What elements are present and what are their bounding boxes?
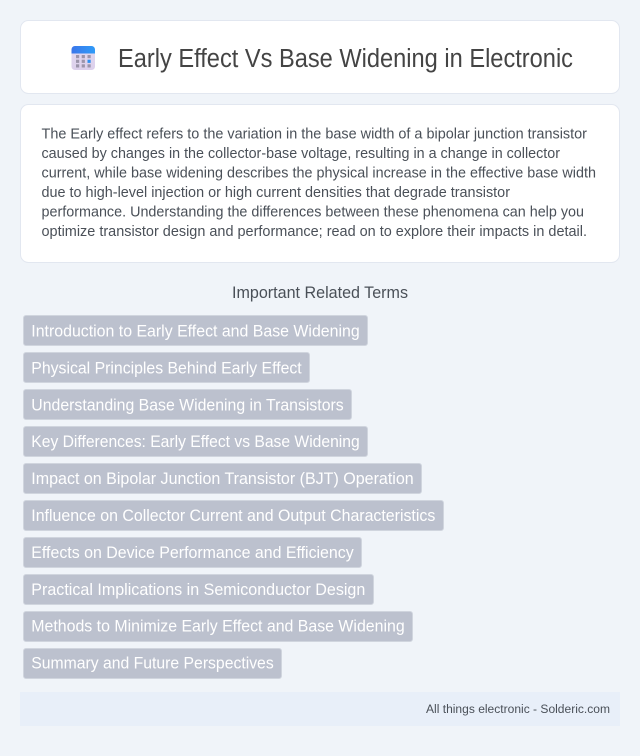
tag: methods to minimize: Methods to Minimize Early Effect and Base Widening (31, 618, 405, 636)
tag: device performance (24, 538, 362, 568)
panel: header card (20, 20, 620, 94)
text block: intro paragraph: performance. Understanding the differences between these phenomena can help you (42, 204, 584, 221)
text block: intro paragraph: caused by changes in the collector-base voltage, resulting in a change in collector (42, 145, 560, 162)
tag: physical principles (24, 352, 310, 382)
tag: practical implications (24, 574, 374, 604)
tag: collector current (24, 500, 444, 530)
tag: BJT impact (24, 464, 422, 494)
title: Early Effect Vs Base Widening in Electronic (118, 45, 573, 73)
tag: understanding base widening (24, 390, 352, 420)
footer bar (20, 692, 620, 726)
tag: BJT impact: Impact on Bipolar Junction Transistor (BJT) Operation (31, 470, 414, 488)
icon: calendar (72, 46, 95, 70)
tag: physical principles: Physical Principles Behind Early Effect (31, 359, 302, 377)
list: related term tags (24, 316, 444, 678)
tag: introduction (24, 316, 368, 346)
tag: methods to minimize (24, 612, 412, 642)
tag: understanding base widening: Understanding Base Widening in Transistors (31, 396, 344, 414)
text block: intro paragraph: due to high-level injection or high current densities that degrade transistor (42, 184, 510, 201)
tag: key differences (24, 426, 368, 456)
text block: intro paragraph: current, while base widening describes the physical increase in the effective base width (42, 165, 596, 182)
text block: intro paragraph: optimize transistor design and performance; read on to explore their impacts in detail. (42, 223, 587, 240)
tag: practical implications: Practical Implications in Semiconductor Design (31, 581, 365, 599)
text block: intro paragraph (42, 126, 596, 240)
text block: intro paragraph: The Early effect refers to the variation in the base width of a bipolar junction transistor (42, 126, 587, 143)
panel: intro paragraph card (20, 104, 620, 262)
tag: device performance: Effects on Device Performance and Efficiency (31, 544, 355, 562)
tag: introduction: Introduction to Early Effect and Base Widening (31, 322, 360, 340)
tag: key differences: Key Differences: Early Effect vs Base Widening (31, 433, 360, 451)
tag: collector current: Influence on Collector Current and Output Characteristics (31, 507, 435, 525)
heading: important related terms: Important Related Terms (232, 284, 408, 302)
tag: summary: Summary and Future Perspectives (31, 655, 274, 673)
footer text: All things electronic - Solderic.com (426, 702, 610, 716)
tag: summary (24, 648, 282, 678)
